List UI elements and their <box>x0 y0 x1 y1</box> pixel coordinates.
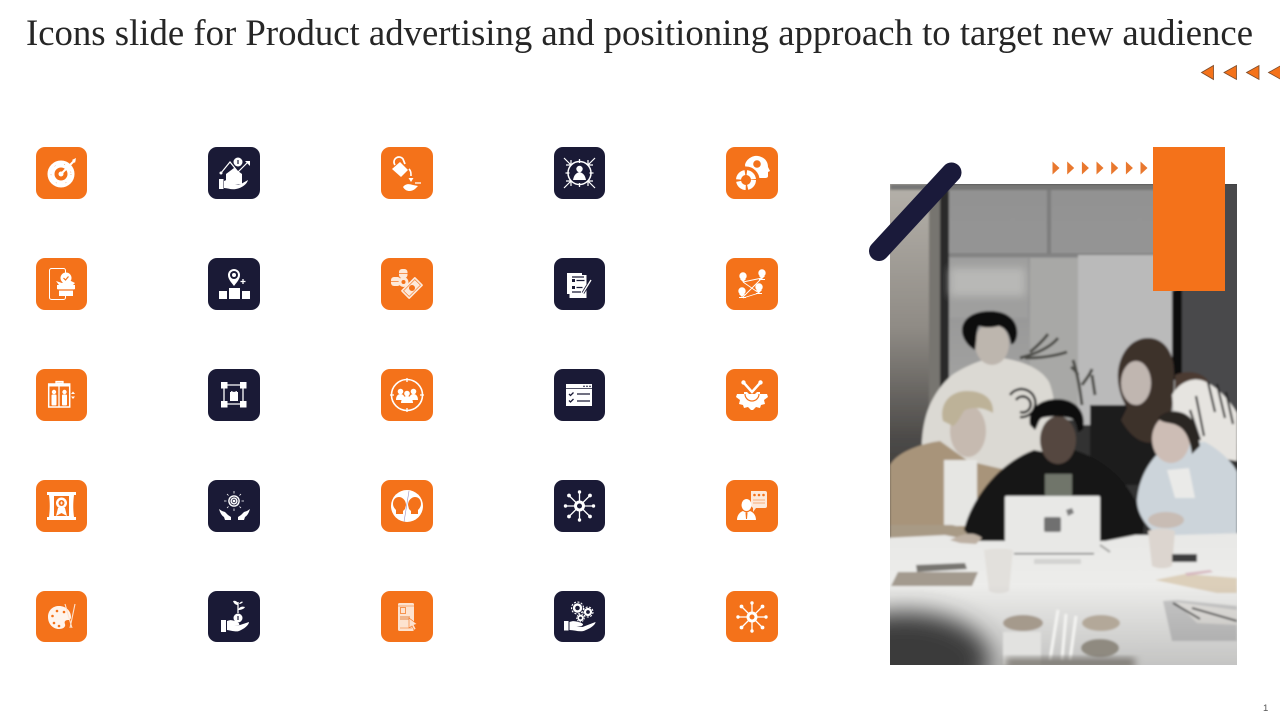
icon: award certificate scroll <box>36 480 87 532</box>
icon: two heads in circle <box>381 480 433 532</box>
photo detail: cups <box>984 548 1013 593</box>
photo detail: plants <box>1020 334 1095 405</box>
icon: hand with money plant <box>208 591 260 642</box>
icon: palette and brushes <box>36 591 87 642</box>
icon: businessperson with rating bubble <box>726 480 778 532</box>
icon: person in crosshair with arrows <box>554 147 605 199</box>
photo detail: center man <box>964 450 1144 544</box>
icon: gear with wrench and tools <box>726 369 778 421</box>
photo detail: curly woman <box>1174 372 1208 388</box>
icon: hand with gears <box>554 591 605 642</box>
photo detail: laptop <box>1005 496 1100 553</box>
photo: team around a laptop <box>890 184 1237 665</box>
icon: target with dart <box>36 147 87 199</box>
icon: hands with target and rays <box>208 480 260 532</box>
decorative bar: navy diagonal <box>879 172 952 251</box>
photo detail: books and phones <box>891 572 978 586</box>
icon: coins and banknote <box>381 258 433 310</box>
photo detail: right woman <box>1137 442 1237 542</box>
icon: head with donut chart <box>726 147 778 199</box>
arrows: top right decoration <box>1202 66 1280 80</box>
icon: hand with house and coin <box>208 147 260 199</box>
photo detail: table <box>885 533 1245 673</box>
orange rectangle <box>1153 147 1225 291</box>
icon: product box network <box>208 369 260 421</box>
arrows: row of small orange triangles <box>1052 162 1148 174</box>
icon: audience in target <box>381 369 433 421</box>
icon: connected location pins <box>726 258 778 310</box>
page number: 1 <box>1263 703 1268 714</box>
icon: phone with cursor <box>381 591 433 642</box>
icon: checklist window <box>554 369 605 421</box>
icon: location pin on podium <box>208 258 260 310</box>
photo detail: back man <box>920 358 1055 471</box>
icon: phone with open box <box>36 258 87 310</box>
icon: documents and pen <box>554 258 605 310</box>
icon: gear network <box>554 480 605 532</box>
photo detail: blond man <box>890 440 1003 530</box>
photo detail: foreground blur <box>890 597 1237 665</box>
title: Icons slide for Product advertising and positioning approach to target new audience <box>26 13 1253 54</box>
icon: paint bucket and hand <box>381 147 433 199</box>
icon: gear network orange <box>726 591 778 642</box>
icon: lift with two people <box>36 369 87 421</box>
